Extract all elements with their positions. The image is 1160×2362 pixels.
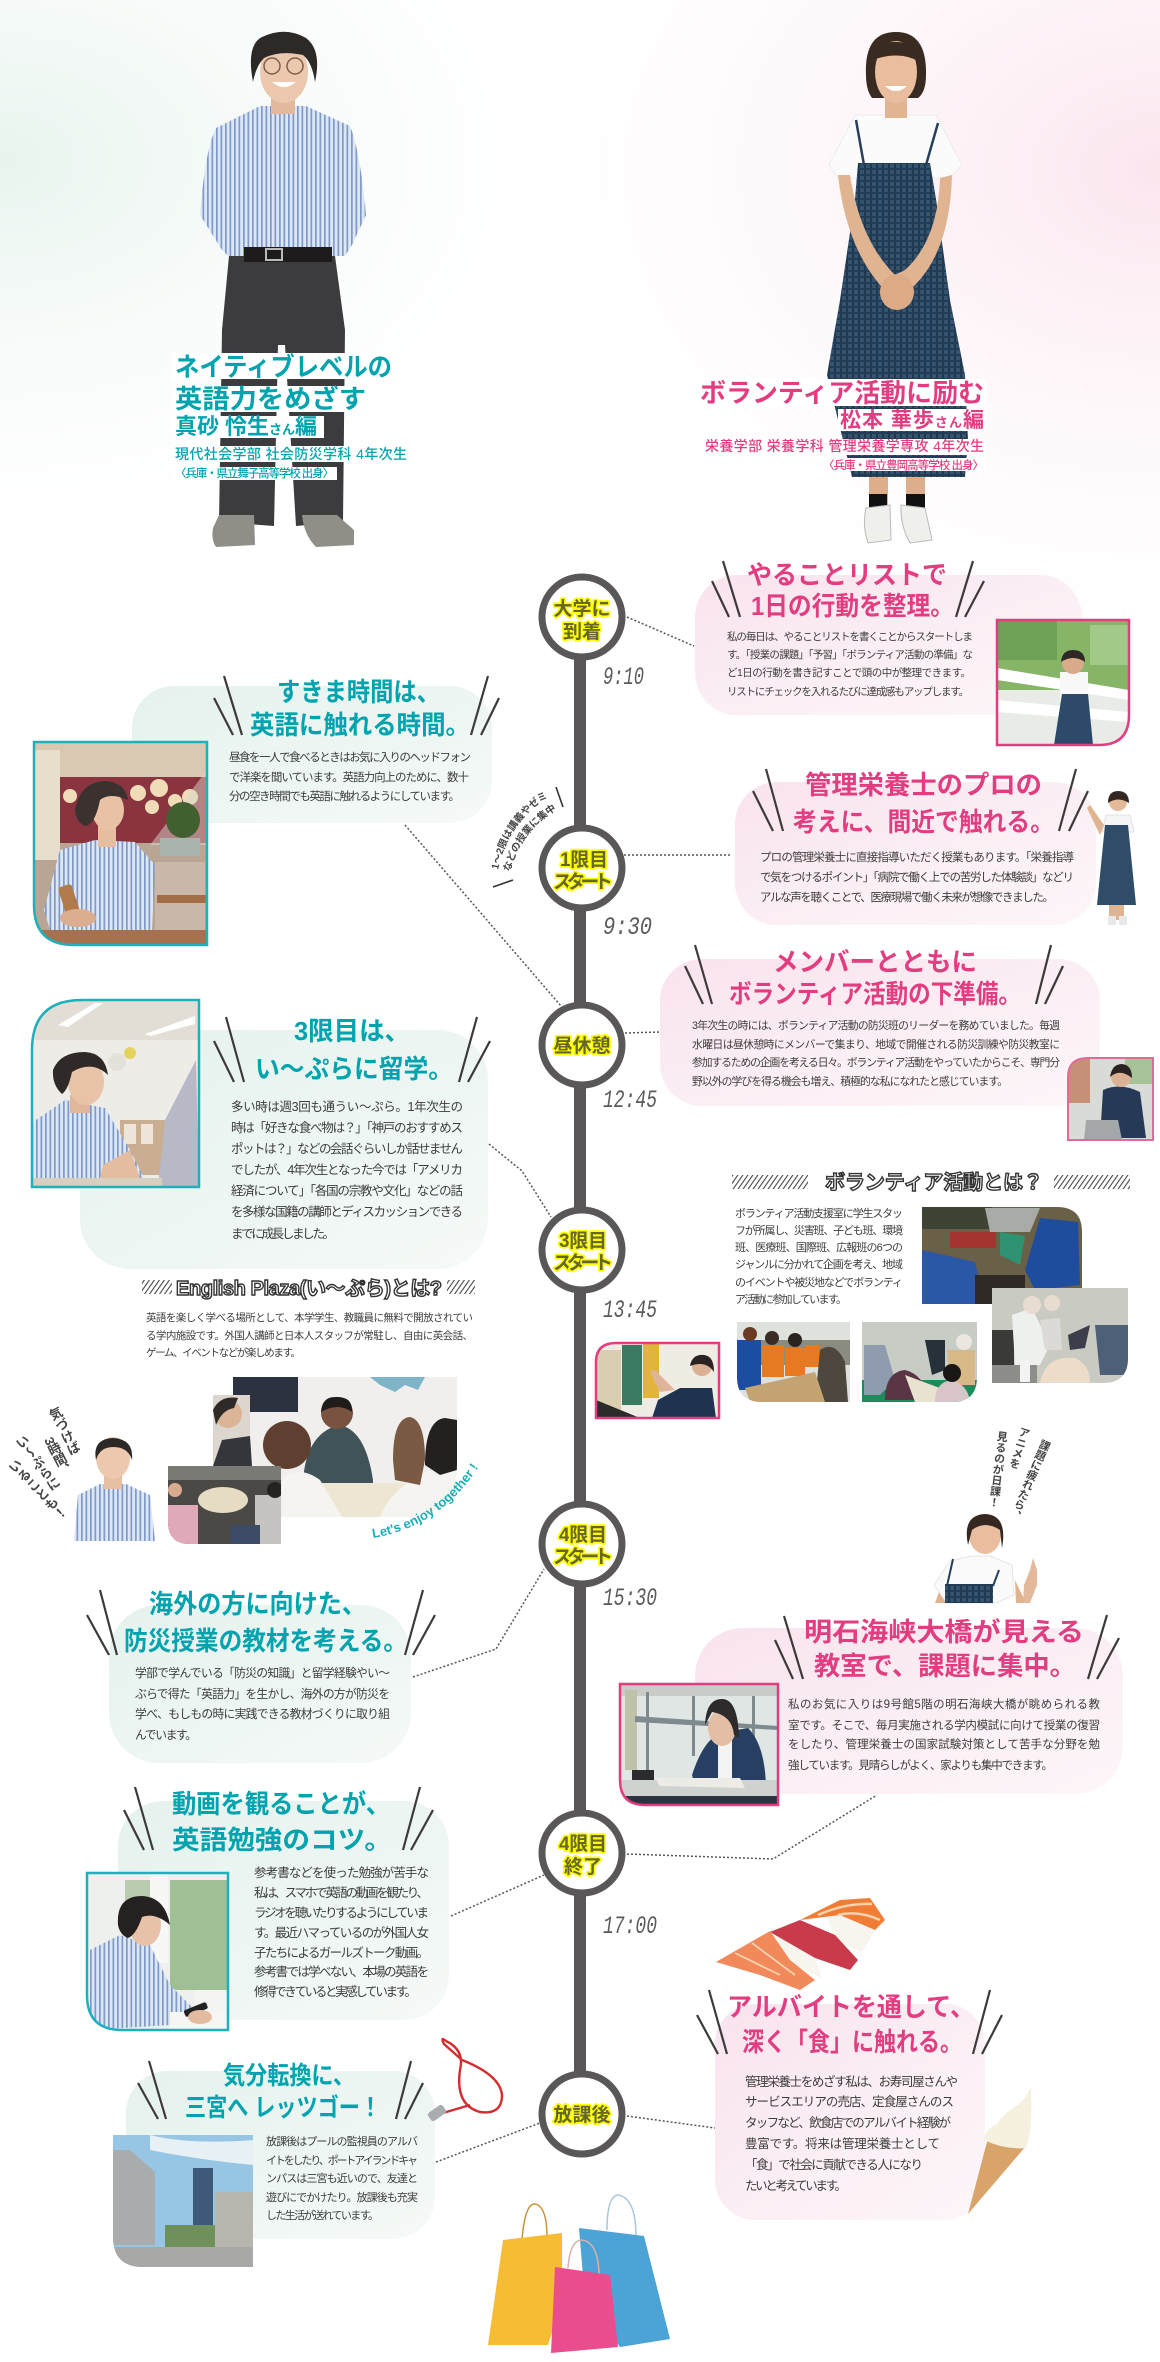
body text: 参考書などを使った勉強が苦手な bbox=[254, 1865, 429, 1880]
heading: 海外の方に向けた、 bbox=[149, 1589, 366, 1619]
photo: indoor workshop bbox=[862, 1322, 977, 1402]
node: arrival 9:10 bbox=[542, 577, 622, 657]
body text: 経済について」「各国の宗教や文化」などの話 bbox=[231, 1183, 463, 1198]
heading: 3限目は、 bbox=[294, 1016, 410, 1046]
figure: female student pointing bbox=[934, 1514, 1037, 1603]
text: volunteer description: 班、医療班、国際班、広報班の6つの bbox=[735, 1240, 903, 1254]
heading bbox=[775, 1615, 1119, 1681]
node: period 4 end 17:00 bbox=[542, 1813, 622, 1893]
body text: 私のお気に入りは9号館5階の明石海峡大橋が眺められる教 bbox=[788, 1697, 1100, 1711]
body text: 参加するための企画を考える日々。ボランティア活動をやっていたからこそ、専門分 bbox=[692, 1055, 1060, 1069]
body text: ど1日の行動を書き記すことで頭の中が整理できます。 bbox=[727, 666, 971, 679]
body text: アルな声を聴くことで、医療現場で働く未来が想像できました。 bbox=[760, 890, 1054, 904]
body text bbox=[788, 1697, 1100, 1772]
photo: cafeteria bbox=[34, 742, 207, 946]
caption: Let's enjoy together: Let's enjoy together ! bbox=[372, 1463, 478, 1538]
panel: Akashi bridge classroom bbox=[620, 1615, 1123, 1806]
panel: Sannomiya bbox=[113, 2039, 502, 2267]
body text: ンパスは三宮も近いので、友達と bbox=[266, 2171, 418, 2185]
panel: volunteer prep bbox=[660, 945, 1153, 1140]
body text: 参考書では学べない、本場の英語を bbox=[254, 1964, 429, 1979]
speech: handwritten note right bbox=[987, 1425, 1052, 1521]
body text: 私の毎日は、やることリストを書くことからスタートしま bbox=[727, 630, 973, 643]
heading: 考えに、間近で触れる。 bbox=[793, 807, 1054, 837]
photo: classroom study bbox=[620, 1684, 778, 1806]
heading: 明石海峡大橋が見える bbox=[804, 1617, 1084, 1647]
photo: student by railing bbox=[997, 620, 1130, 746]
body text bbox=[135, 1666, 390, 1742]
body text: 水曜日は昼休憩時にメンバーで集まり、地域で開催される防災訓練や防災教室に bbox=[692, 1037, 1060, 1051]
time labels: 17:00 bbox=[603, 1912, 657, 1941]
body text: す。「授業の課題」「予習」「ボランティア活動の準備」な bbox=[727, 648, 973, 661]
body text: 室です。そこで、毎月実施される学内模試に向けて授業の復習 bbox=[788, 1718, 1100, 1732]
speech: handwritten note right: アニメを bbox=[1007, 1425, 1031, 1470]
photo: party table bbox=[168, 1466, 283, 1545]
body text: を多様な国籍の講師とディスカッションできる bbox=[231, 1204, 463, 1219]
heading: ボランティア活動の下準備。 bbox=[729, 979, 1021, 1009]
body text: 学べ、もしもの時に実践できる教材づくりに取り組 bbox=[135, 1707, 390, 1721]
body text: タッフなど、飲食店でのアルバイト経験が bbox=[745, 2115, 951, 2130]
heading: やることリストで bbox=[747, 560, 947, 590]
body text: プロの管理栄養士に直接指導いただく授業もあります。「栄養指導 bbox=[760, 850, 1074, 864]
text: volunteer description: ア活動に参加しています。 bbox=[735, 1292, 847, 1306]
panel: part-time job bbox=[697, 1990, 1002, 2220]
body text: した生活が送れています。 bbox=[266, 2208, 379, 2222]
connector lines bbox=[405, 617, 877, 2162]
panel: to-do list bbox=[695, 560, 1130, 746]
body text bbox=[745, 2074, 958, 2193]
speech: handwritten note left bbox=[5, 1404, 82, 1523]
body text: たいと考えています。 bbox=[745, 2179, 847, 2193]
body text: 昼食を一人で食べるときはお気に入りのヘッドフォン bbox=[229, 750, 471, 764]
side note: periods 1-2: などの授業に集中！ bbox=[503, 804, 555, 871]
text: English Plaza description: ゲーム、イベントなどが楽しめます。 bbox=[146, 1346, 301, 1359]
panel: dietitian talk bbox=[735, 769, 1136, 925]
body text bbox=[266, 2134, 418, 2222]
heading: 三宮へ レッツゴー！ bbox=[185, 2093, 381, 2122]
body text: で洋楽を聞いています。英語力向上のために、数十 bbox=[229, 770, 469, 784]
heading bbox=[124, 1787, 433, 1855]
node: period 1 9:30: スタート bbox=[553, 871, 613, 893]
title block: female student bbox=[698, 378, 986, 472]
heading bbox=[214, 1016, 490, 1084]
node: lunch 12:45: 昼休憩 bbox=[554, 1035, 610, 1057]
speech: handwritten note left: い～ぷらに bbox=[12, 1433, 63, 1494]
node: period 3 13:45: スタート bbox=[553, 1252, 613, 1274]
body text: でしたが、4年次生となった今では「アメリカ bbox=[231, 1162, 463, 1177]
body text: サービスエリアの売店、定食屋さんのス bbox=[745, 2094, 954, 2109]
node: period 4 15:30: 4限目 bbox=[559, 1524, 607, 1546]
body text: 野以外の学びを得る機会も増え、積極的な私になれたと感じています。 bbox=[692, 1074, 1008, 1088]
speech: handwritten note right: 見るのが日課！ bbox=[987, 1430, 1008, 1508]
body text: 修得できていると実感しています。 bbox=[254, 1984, 417, 1999]
heading: メンバーとともに bbox=[773, 947, 977, 977]
photo: kitchen volunteers bbox=[992, 1288, 1128, 1383]
heading: い～ぷらに留学。 bbox=[255, 1054, 453, 1084]
body text: 管理栄養士をめざす私は、お寿司屋さんや bbox=[745, 2074, 958, 2089]
body text bbox=[231, 1100, 463, 1241]
body text: 放課後はプールの監視員のアルバ bbox=[266, 2134, 418, 2148]
icon: whistle lanyard bbox=[427, 2039, 502, 2122]
body text: ポットは？」などの会話ぐらいしか話せません bbox=[231, 1142, 463, 1156]
body text: 分の空き時間でも英語に触れるようにしています。 bbox=[229, 789, 460, 803]
body text: イトをしたり、ポートアイランドキャ bbox=[266, 2154, 418, 2167]
photo: city street bbox=[113, 2135, 253, 2267]
node: period 4 15:30: スタート bbox=[553, 1546, 613, 1568]
body text: 「食」で社会に貢献できる人になり bbox=[745, 2157, 923, 2172]
panel: English Plaza study bbox=[32, 1000, 490, 1269]
heading bbox=[138, 2061, 423, 2122]
body text: 子たちによるガールズトーク動画。 bbox=[254, 1945, 429, 1960]
node: after school bbox=[542, 2074, 622, 2154]
timeline line bbox=[574, 650, 586, 2080]
node: period 1 9:30: 1限目 bbox=[560, 849, 608, 871]
text: volunteer description: のイベントや被災地などでボランティ bbox=[735, 1276, 903, 1289]
photo: outdoor booth volunteers bbox=[737, 1322, 850, 1402]
body text: す。最近ハマっているのが外国人女 bbox=[254, 1925, 429, 1940]
text: volunteer description bbox=[735, 1206, 903, 1306]
heading: すきま時間は、 bbox=[277, 677, 440, 707]
side note: periods 1-2 bbox=[492, 786, 564, 888]
time labels: 13:45 bbox=[603, 1296, 657, 1325]
body text: 多い時は週3回も通うい～ぷら。1年次生の bbox=[231, 1100, 463, 1114]
speech: handwritten note left: 気づけば bbox=[45, 1404, 82, 1458]
text: volunteer description: ジャンルに分かれて企画を考え、地域 bbox=[735, 1257, 903, 1271]
node: period 3 13:45: 3限目 bbox=[559, 1230, 607, 1252]
heading bbox=[753, 769, 1088, 837]
title block: male student: ネイティブレベルの bbox=[175, 352, 392, 382]
text: English Plaza description: る学内施設です。外国人講師と日本人スタッフが常駐し、自由に英会話、 bbox=[146, 1329, 473, 1342]
time labels bbox=[603, 663, 657, 1941]
heading bbox=[685, 945, 1063, 1009]
body text: 私は、スマホで英語の動画を観たり、 bbox=[254, 1886, 429, 1900]
node: period 3 13:45 bbox=[542, 1210, 622, 1290]
panel: teaching materials bbox=[87, 1589, 435, 1763]
heading: 1日の行動を整理。 bbox=[751, 591, 954, 621]
body text: 強しています。見晴らしがよく、家よりも集中できます。 bbox=[788, 1758, 1053, 1772]
photo: group at English Plaza bbox=[213, 1377, 457, 1517]
heading: 教室で、課題に集中。 bbox=[814, 1651, 1076, 1681]
heading bbox=[87, 1589, 435, 1656]
body text: 時は「好きな食べ物は？」「神戸のおすすめス bbox=[231, 1120, 463, 1135]
body text: ぶらで得た「英語力」を生かし、海外の方が防災を bbox=[135, 1687, 390, 1701]
node: period 4 end 17:00: 終了 bbox=[564, 1856, 602, 1878]
body text: 遊びにでかけたり。放課後も充実 bbox=[266, 2190, 418, 2204]
title block: male student: 英語力をめざす bbox=[175, 384, 366, 414]
heading: 気分転換に、 bbox=[223, 2062, 355, 2090]
panel: free time bbox=[34, 676, 499, 946]
node: period 4 15:30 bbox=[542, 1504, 622, 1584]
body text bbox=[254, 1865, 429, 1999]
speech: handwritten note left: いることも！ bbox=[5, 1457, 70, 1523]
heading: アルバイトを通して、 bbox=[727, 1992, 975, 2022]
time labels: 9:30 bbox=[603, 913, 652, 942]
speech: handwritten note right: 課題に疲れたら、 bbox=[1007, 1437, 1052, 1521]
title block: female student: 〈兵庫・県立豊岡高等学校 出身〉 bbox=[823, 458, 984, 472]
body text bbox=[760, 850, 1074, 904]
title block: male student: 現代社会学部 社会防災学科 4年次生 bbox=[175, 446, 407, 462]
title block: male student: 真砂 怜生さん編 bbox=[175, 414, 317, 439]
icon: ice cream bbox=[968, 2086, 1031, 2214]
text: English Plaza description bbox=[146, 1311, 473, 1359]
heading bbox=[697, 1990, 1002, 2057]
photo: library bbox=[596, 1343, 719, 1418]
heading: 英語勉強のコツ。 bbox=[172, 1825, 392, 1855]
body text: ラジオを聴いたりするようにしていま bbox=[254, 1906, 429, 1920]
figure: small female student bbox=[1087, 791, 1136, 925]
title block: male student bbox=[172, 352, 410, 480]
body text: 豊富です。将来は管理栄養士として bbox=[745, 2136, 940, 2151]
body text: で気をつけるポイント」「病院で働く上での苦労した体験談」などリ bbox=[760, 870, 1074, 884]
photo: laptop outdoors bbox=[1068, 1058, 1153, 1140]
icon: sushi bbox=[716, 1898, 885, 1990]
heading bbox=[712, 560, 984, 621]
heading: English Plaza: English Plaza(い～ぷら)とは? bbox=[176, 1278, 442, 1300]
body text: をしたり、管理栄養士の国家試験対策として苦手な分野を勉 bbox=[788, 1737, 1100, 1751]
portrait: female student bbox=[827, 32, 968, 543]
body text bbox=[727, 630, 973, 698]
side note: periods 1-2: 1～2限は講義やゼミ bbox=[492, 792, 546, 870]
title block: female student: 栄養学部 栄養学科 管理栄養学専攻 4年次生 bbox=[705, 438, 984, 454]
node: after school: 放課後 bbox=[554, 2104, 610, 2126]
body text bbox=[692, 1018, 1060, 1088]
body text bbox=[229, 750, 471, 803]
heading bbox=[214, 676, 499, 740]
text: volunteer description: フが所属し、災害班、子ども班、環境 bbox=[735, 1223, 903, 1237]
node: arrival 9:10: 到着 bbox=[563, 621, 601, 643]
time labels: 12:45 bbox=[603, 1086, 657, 1115]
heading: 英語に触れる時間。 bbox=[250, 710, 470, 740]
title block: male student: 〈兵庫・県立舞子高等学校 出身〉 bbox=[175, 466, 334, 480]
body text: んでいます。 bbox=[135, 1728, 197, 1742]
title block: female student: 松本 華歩さん編 bbox=[840, 409, 984, 432]
speech: handwritten note left: 3時間、 bbox=[41, 1435, 74, 1479]
photo: conversation bbox=[32, 1000, 199, 1187]
node: lunch 12:45 bbox=[542, 1005, 622, 1085]
heading: volunteer bbox=[732, 1171, 1130, 1194]
photo: watching phone bbox=[87, 1873, 228, 2030]
time labels: 15:30 bbox=[603, 1584, 657, 1613]
heading: volunteer: ボランティア活動とは？ bbox=[825, 1171, 1043, 1194]
heading: 防災授業の教材を考える。 bbox=[124, 1626, 407, 1656]
body text: リストにチェックを入れるたびに達成感もアップします。 bbox=[727, 685, 969, 698]
icon: shopping bags bbox=[488, 2195, 670, 2353]
heading: 深く「食」に触れる。 bbox=[742, 2027, 962, 2057]
text: volunteer description: ボランティア活動支援室に学生スタッ bbox=[735, 1206, 903, 1220]
timeline nodes bbox=[542, 577, 622, 2154]
text: English Plaza description: 英語を楽しく学べる場所として、本学学生、教職員に無料で開放されてい bbox=[146, 1311, 473, 1324]
photo: disaster volunteers bbox=[922, 1207, 1082, 1304]
time labels: 9:10 bbox=[603, 663, 644, 692]
panel: learning from videos bbox=[87, 1787, 449, 2030]
title block: female student: ボランティア活動に励む bbox=[700, 378, 984, 408]
portrait: male student bbox=[200, 32, 366, 547]
heading: 管理栄養士のプロの bbox=[805, 770, 1042, 800]
node: arrival 9:10: 大学に bbox=[553, 597, 611, 620]
node: period 4 end 17:00: 4限目 bbox=[559, 1833, 607, 1855]
body text: までに成長しました。 bbox=[231, 1227, 335, 1241]
body text: 学部で学んでいる「防災の知識」と留学経験やい～ bbox=[135, 1666, 390, 1680]
body text: 3年次生の時には、ボランティア活動の防災班のリーダーを務めていました。毎週 bbox=[692, 1018, 1060, 1032]
figure: male student small bbox=[74, 1437, 155, 1541]
heading: 動画を観ることが、 bbox=[172, 1789, 390, 1819]
node: period 1 9:30 bbox=[542, 828, 622, 908]
